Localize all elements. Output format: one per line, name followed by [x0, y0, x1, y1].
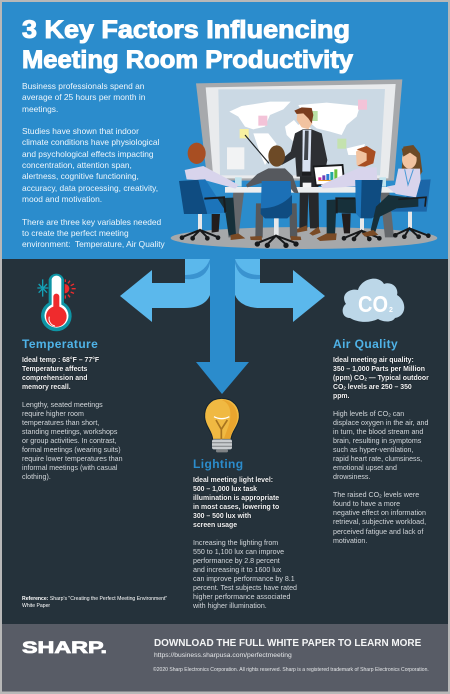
icon: CO2 cloud: 2 [389, 307, 393, 314]
text block: air quality key facts: CO2 levels are 250 – 350 [333, 384, 412, 391]
icon: light bulb [205, 398, 239, 452]
world map [229, 102, 365, 165]
icon: CO2 cloud: CO [358, 291, 388, 317]
text block: air quality details: brain, resulting in symptoms [333, 437, 421, 445]
pointer [245, 135, 269, 163]
text block: reference: White Paper [22, 603, 50, 609]
text block: air quality details: rapid heart rate, clumsiness, [333, 455, 422, 463]
heading: air quality: Air Quality [333, 337, 398, 351]
text block: lighting key facts: in most cases, lowering to [193, 504, 279, 511]
text block: air quality details: High levels of CO2 can [333, 410, 404, 418]
text block: introduction: Studies have shown that indoor [22, 126, 139, 136]
text block: temperature details: clothing). [22, 473, 51, 481]
text block: air quality details: retrieval, subjective workload, [333, 518, 426, 526]
floor shadow [171, 227, 437, 249]
text block: air quality details: in turn, the blood stream and [333, 428, 423, 436]
icon: thermometer [37, 274, 76, 331]
sticky notes [240, 100, 367, 149]
arrow: down to lighting [196, 255, 249, 394]
text block: lighting details: can improve performance by 8.1 [193, 575, 295, 583]
panel: footer background [2, 624, 448, 692]
text block: lighting details: performance by 2.8 percent [193, 557, 280, 565]
text block: temperature details: or group activities. In contrast, [22, 437, 117, 445]
text block: temperature key facts: Temperature affects [22, 366, 87, 373]
text block: introduction: mood and motivation. [22, 194, 102, 204]
text block: introduction: environment: Temperature, Air Quality [22, 239, 165, 249]
title: 3 Key Factors Influencing [22, 16, 350, 44]
text block: lighting key facts: 300 – 500 lux with [193, 513, 251, 520]
text block: temperature key facts: memory recall. [22, 384, 71, 391]
arrow: left to temperature [120, 259, 212, 322]
person: centre back view [246, 145, 301, 248]
person: right with beard [317, 146, 383, 241]
text block: temperature details: standing meetings, workshops [22, 428, 117, 436]
text block: temperature details [22, 400, 123, 481]
text block: air quality details: motivation. [333, 537, 367, 545]
text block: air quality details: emotional upset and [333, 464, 397, 472]
logo: SHARP: SHARP. [22, 639, 107, 657]
text block: air quality details: drowsiness. [333, 473, 370, 481]
text block: introduction: and psychological effects impacting [22, 149, 154, 159]
text block: lighting details: with higher illumination. [193, 602, 267, 610]
text block: temperature details: formal meetings (wearing suits) [22, 446, 121, 454]
title: Meeting Room Productivity [22, 46, 353, 74]
text block: introduction: average of 25 hours per month in [22, 92, 145, 102]
text block: lighting key facts: screen usage [193, 522, 237, 529]
panel: dark content background [2, 259, 448, 624]
text block: temperature details: require higher room [22, 410, 84, 418]
presenter [280, 107, 327, 236]
heading: temperature: Temperature [22, 337, 98, 351]
table [225, 177, 397, 237]
presentation screen [196, 79, 402, 181]
text block: lighting key facts: Ideal meeting light level: [193, 476, 273, 484]
title [22, 16, 353, 74]
text block: lighting key facts [193, 476, 280, 529]
text block: air quality details: negative effect on information [333, 509, 426, 517]
text block: temperature key facts [22, 356, 99, 391]
text block: introduction: concentration, attention span, [22, 160, 132, 170]
footer link: https://business.sharpusa.com/perfectmeeting [154, 652, 292, 659]
text block: air quality key facts: ppm. [333, 393, 349, 400]
text block: lighting key facts: 500 – 1,000 lux task [193, 486, 257, 493]
person: woman at right [362, 145, 431, 239]
text block: lighting key facts: illumination is appropriate [193, 495, 279, 502]
text block: introduction: alertness, cognitive functioning, [22, 171, 139, 181]
text block: temperature details: Lengthy, seated meetings [22, 400, 103, 408]
text block: air quality details: The raised CO2 levels were [333, 491, 419, 499]
text block: air quality details: displace oxygen in the air, and [333, 419, 428, 427]
text block: introduction: meetings. [22, 104, 58, 114]
text block: air quality details: found to have a more [333, 500, 400, 508]
text block: air quality details [333, 410, 428, 545]
illustration: meeting room scene [171, 79, 437, 249]
text block: temperature details: require lower temperatures than [22, 455, 123, 463]
text block: air quality key facts [333, 356, 429, 400]
text block: temperature details: informal meetings (with casual [22, 464, 117, 472]
text block: introduction: There are three key variables needed [22, 217, 161, 227]
panel: blue header background [2, 2, 448, 260]
icon: CO2 cloud [343, 279, 404, 322]
arrow: right to air quality [233, 259, 325, 322]
text block: air quality key facts: (ppm) CO2 — Typical outdoor [333, 375, 429, 382]
text block: lighting details: Increasing the lighting from [193, 538, 278, 546]
footer copyright: ©2020 Sharp Electronics Corporation. All rights reserved. Sharp is a registered trademark of Sharp Electronics Corporation. [153, 667, 429, 673]
text block: air quality key facts: Ideal meeting air quality: [333, 356, 414, 364]
text block: introduction: to create the perfect meeting [22, 228, 129, 238]
person: left back view [179, 143, 245, 241]
text block: air quality details: such as hyper-ventilation, [333, 446, 413, 454]
text block: lighting details [193, 538, 297, 610]
text block: lighting details: 550 to 1,100 lux can improve [193, 548, 284, 556]
text block: temperature key facts: comprehension and [22, 375, 87, 382]
footer heading: download call to action: DOWNLOAD THE FULL WHITE PAPER TO LEARN MORE [154, 638, 421, 649]
text block: lighting details: and increasing it to 1600 lux [193, 566, 281, 574]
text block: reference [22, 596, 167, 609]
heading: lighting: Lighting [193, 457, 244, 471]
text block: reference: Reference: Sharp's "Creating the Perfect Meeting Environment" [22, 596, 167, 602]
text block: air quality details: perceived fatigue and lack of [333, 528, 423, 536]
text block: lighting details: higher performance associated [193, 593, 290, 601]
text block: lighting details: percent. Test subjects have rated [193, 584, 297, 592]
text block: introduction: Business professionals spend an [22, 81, 144, 91]
text block: introduction [22, 81, 165, 249]
text block: temperature key facts: Ideal temp : 68°F – 77°F [22, 356, 99, 364]
text block: introduction: climate conditions have physiological [22, 137, 159, 147]
text block: air quality key facts: 350 – 1,000 Parts per Million [333, 366, 425, 373]
text block: introduction: accuracy, data processing, creativity, [22, 183, 158, 193]
text block: temperature details: temperatures than short, [22, 419, 99, 427]
laptop [313, 164, 345, 186]
